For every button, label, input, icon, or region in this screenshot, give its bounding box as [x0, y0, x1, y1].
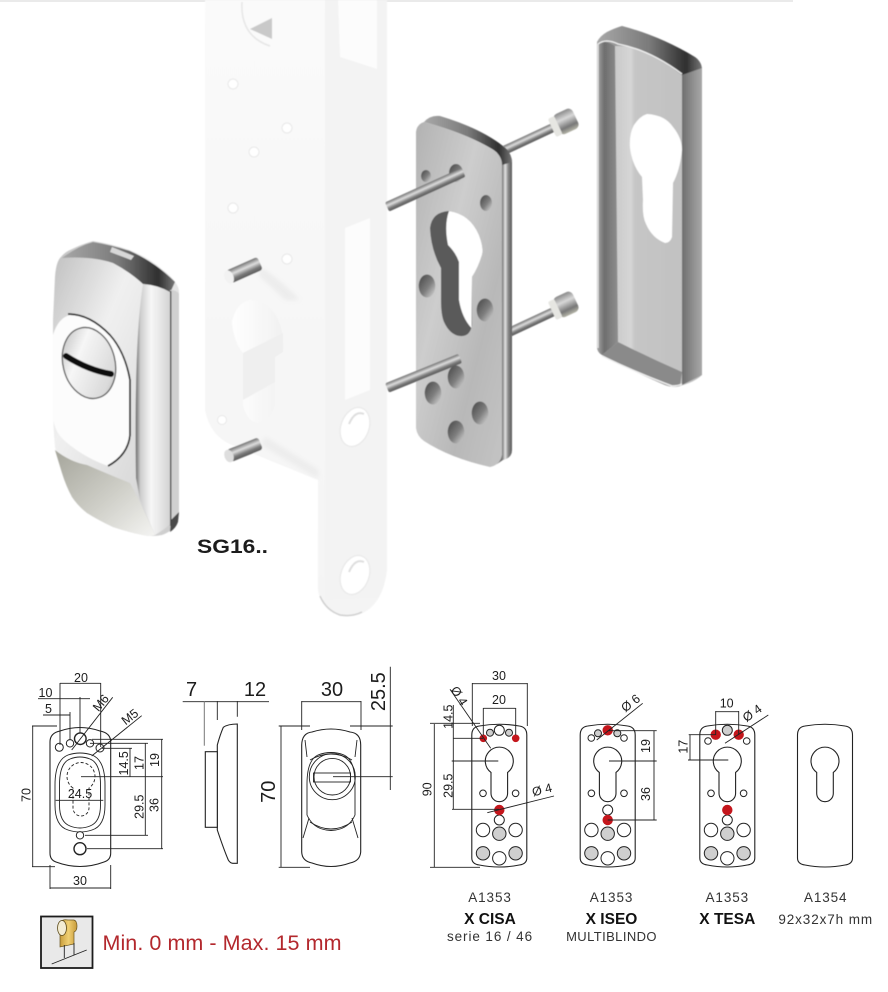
plate drawing: A1353 X CISA: 30	[492, 669, 506, 683]
technical drawing: front view: 25.5	[368, 672, 390, 711]
key slot	[66, 356, 111, 374]
caption: A1354: A1354	[804, 890, 847, 905]
technical drawing: front view	[258, 667, 393, 867]
technical drawing: back view with dimensions	[20, 671, 163, 889]
technical drawing: front view: 30	[321, 679, 343, 701]
screws behind the plate	[503, 107, 580, 336]
technical drawing: back view with dimensions: 19	[148, 753, 162, 767]
caption: A1353 X TESA: A1353	[706, 890, 749, 905]
plate drawing: A1353 X ISEO: 19	[639, 739, 653, 753]
technical drawing: back view with dimensions: 36	[147, 798, 161, 812]
caption: A1354	[778, 890, 873, 927]
plate drawing: A1354 cover	[798, 724, 852, 867]
outer cover with keyhole	[597, 26, 702, 387]
caption: A1353 X TESA: X TESA	[699, 911, 755, 928]
satin lower section	[55, 450, 155, 536]
plate drawing: A1353 X TESA: Ø 4	[740, 702, 765, 725]
plate drawing: A1353 X CISA: Ø 4	[531, 781, 554, 799]
projection range: Min. 0 mm - Max. 15 mm	[102, 931, 342, 955]
product code: SG16..	[197, 536, 268, 558]
technical drawing: front view: 70	[258, 781, 280, 803]
technical drawing: back view with dimensions: M5	[119, 706, 141, 728]
caption: A1353 X ISEO	[566, 890, 657, 944]
backing plate	[385, 116, 512, 467]
icon: cylinder projection	[41, 916, 92, 968]
escutcheon product photo	[53, 241, 179, 536]
technical drawing: back view with dimensions: 30	[73, 874, 87, 888]
caption: A1353 X ISEO: A1353	[590, 890, 633, 905]
small lock holes	[218, 79, 292, 424]
plate drawing: A1353 X CISA: 20	[492, 693, 506, 707]
technical drawing: back view with dimensions: 24.5	[68, 787, 92, 801]
plate drawing: A1353 X ISEO: Ø 6	[618, 692, 643, 715]
plate drawing: A1353 X ISEO: 36	[639, 787, 653, 801]
photo: exploded assembly of lock, plate, screws and cover	[53, 0, 702, 616]
caption: A1353 X TESA	[699, 890, 755, 928]
technical drawing: back view with dimensions: M6	[90, 692, 112, 714]
plate drawing: A1353 X CISA: Ø 4	[448, 684, 470, 708]
countersunk screw holes	[335, 403, 375, 451]
plate drawing: A1353 X CISA: 14.5	[441, 704, 455, 729]
triangle mark	[250, 18, 272, 39]
plate drawing: A1353 X TESA: 10	[720, 696, 734, 710]
caption: A1353 X ISEO: X ISEO	[586, 911, 637, 928]
lock body with faceplate	[205, 0, 387, 616]
technical drawing: side profile	[183, 679, 269, 863]
technical drawing: side profile: 7	[186, 679, 197, 701]
technical drawing: back view with dimensions: 70	[20, 788, 34, 802]
technical drawing: back view with dimensions: 17	[132, 756, 146, 770]
key cylinder	[55, 322, 123, 404]
caption: A1353 X CISA: X CISA	[464, 911, 516, 928]
caption: A1354: 92x32x7h mm	[778, 912, 873, 927]
top rim	[62, 242, 175, 293]
plate holes	[419, 164, 493, 444]
plate drawing: A1353 X TESA: 17	[676, 740, 690, 754]
plate drawing: A1353 X ISEO	[580, 692, 657, 867]
plate drawing: A1353 X CISA: 90	[421, 782, 435, 796]
raised shield	[53, 315, 130, 466]
lock pins	[222, 257, 263, 285]
technical drawing: back view with dimensions: 20	[74, 671, 88, 685]
caption: A1353 X CISA: serie 16 / 46	[447, 929, 533, 944]
plate drawing: A1353 X CISA	[421, 669, 554, 867]
caption: A1353 X CISA	[447, 890, 533, 944]
caption: A1353 X CISA: A1353	[468, 890, 512, 905]
caption: A1353 X ISEO: MULTIBLINDO	[566, 929, 657, 944]
technical drawing: side profile: 12	[244, 679, 266, 701]
side face	[136, 284, 170, 535]
technical drawing: back view with dimensions: 10	[39, 686, 52, 700]
plate drawing: A1353 X TESA	[676, 696, 768, 867]
technical drawing: back view with dimensions: 29.5	[132, 794, 146, 819]
cylinder hole in the lock	[232, 300, 283, 423]
plate drawing: A1353 X CISA: 29.5	[441, 773, 455, 798]
technical drawing: back view with dimensions: 14.5	[117, 751, 131, 775]
plate keyhole	[430, 211, 483, 336]
technical drawing: back view with dimensions: 5	[45, 702, 52, 716]
